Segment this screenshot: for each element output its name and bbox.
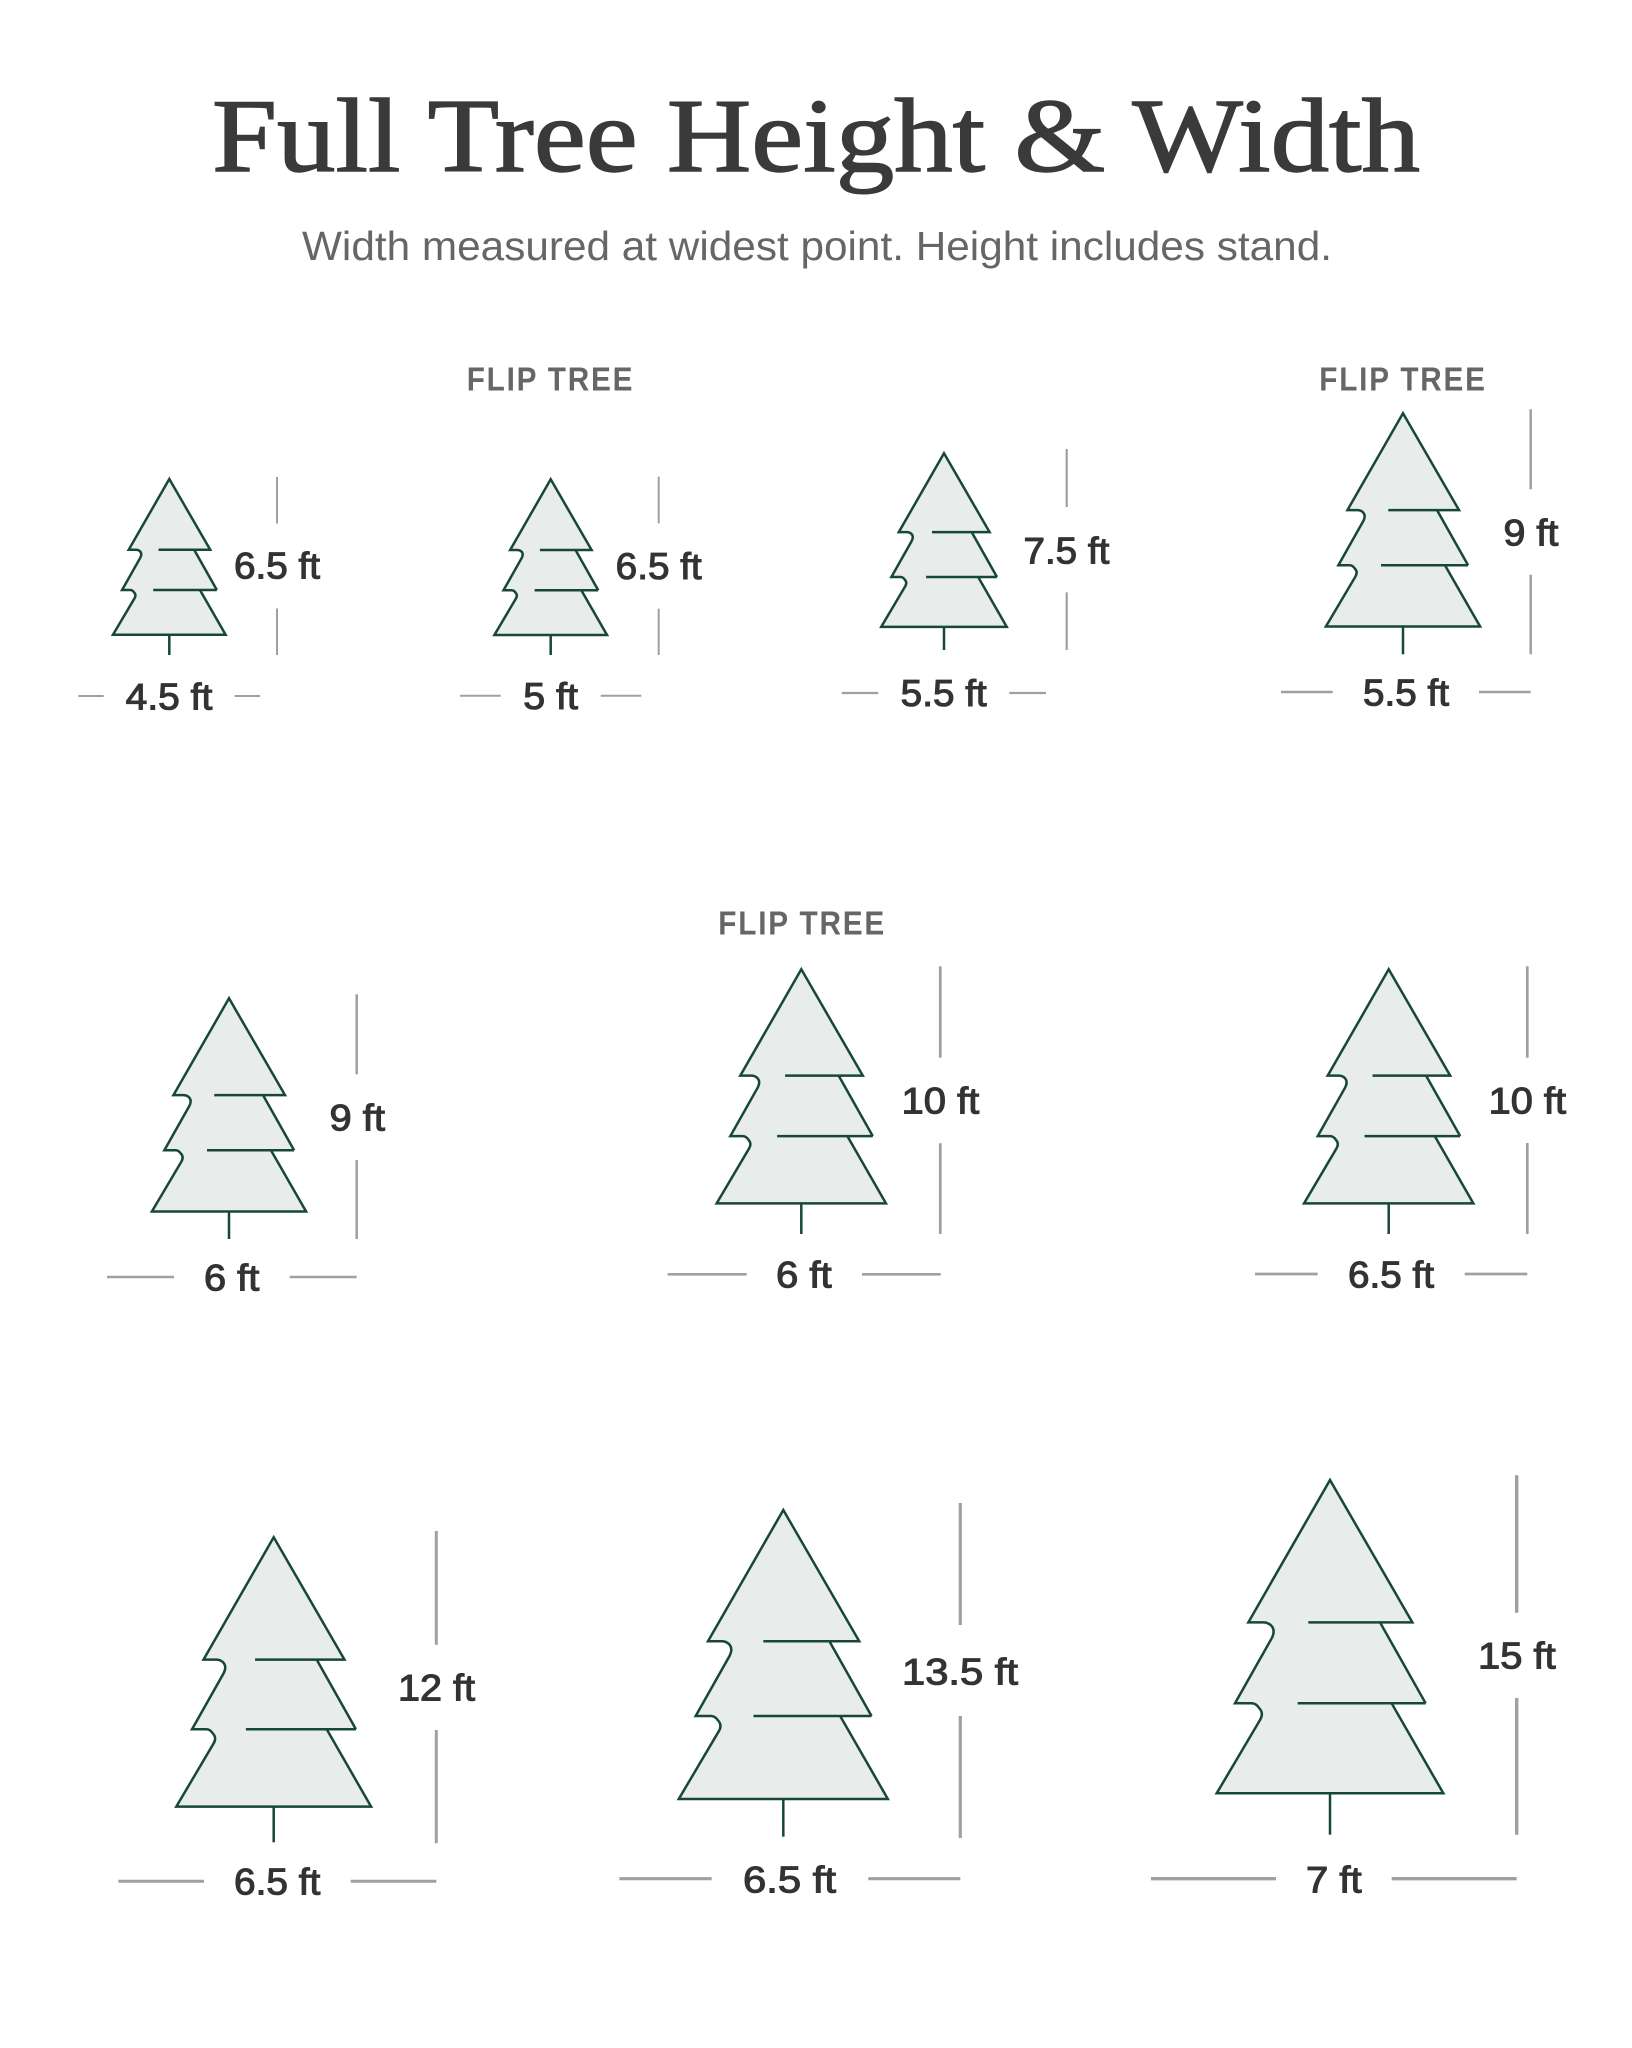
icon: tree (717, 969, 886, 1234)
tree panel: 6 ft wide, 10 ft tall (668, 966, 980, 1295)
width measure: 6.5 ft (1348, 1254, 1435, 1295)
tree panel: 6 ft wide, 9 ft tall (107, 994, 386, 1298)
tree panel: 7 ft wide, 15 ft tall (1151, 1475, 1556, 1901)
icon: tree (113, 479, 226, 655)
icon: tree (1217, 1480, 1443, 1835)
height measure: 13.5 ft (902, 1651, 1019, 1692)
icon: tree (679, 1510, 888, 1837)
flip tree label: FLIP TREE (1319, 360, 1487, 397)
flip tree label: FLIP TREE (718, 904, 886, 941)
height measure: 10 ft (1489, 1080, 1567, 1121)
height measure: 7.5 ft (1024, 530, 1110, 572)
width measure: 5 ft (523, 676, 579, 717)
subtitle: Width measured at widest point. Height includes stand. (302, 223, 1332, 269)
tree panel: 5.5 ft wide, 7.5 ft tall (842, 449, 1110, 714)
height measure: 9 ft (1504, 512, 1559, 553)
height measure: 9 ft (330, 1098, 386, 1139)
flip tree label: FLIP TREE (467, 360, 634, 397)
icon: tree (152, 998, 306, 1239)
icon: tree (1326, 413, 1480, 654)
icon: tree (1304, 969, 1473, 1234)
width measure: 6 ft (776, 1254, 832, 1295)
height measure: 12 ft (398, 1668, 476, 1709)
width measure: 7 ft (1306, 1860, 1362, 1901)
width measure: 6.5 ft (743, 1860, 837, 1901)
tree panel: 6.5 ft wide, 13.5 ft tall (619, 1503, 1019, 1901)
width measure: 5.5 ft (901, 673, 987, 714)
tree panel: 5.5 ft wide, 9 ft tall (1281, 409, 1559, 713)
tree panel: 4.5 ft wide, 6.5 ft tall (78, 477, 321, 718)
icon: tree (881, 453, 1007, 650)
title: Full Tree Height & Width (212, 77, 1420, 194)
tree panel: 6.5 ft wide, 12 ft tall (118, 1531, 476, 1902)
tree panel: 6.5 ft wide, 10 ft tall (1255, 966, 1567, 1295)
width measure: 6 ft (204, 1257, 260, 1298)
width measure: 5.5 ft (1363, 672, 1450, 713)
height measure: 15 ft (1478, 1636, 1556, 1677)
icon: tree (176, 1537, 371, 1842)
height measure: 10 ft (902, 1080, 980, 1121)
width measure: 4.5 ft (126, 676, 213, 718)
height measure: 6.5 ft (234, 546, 321, 586)
tree panel: 5 ft wide, 6.5 ft tall (460, 477, 702, 717)
width measure: 6.5 ft (234, 1862, 321, 1902)
icon: tree (494, 479, 607, 655)
height measure: 6.5 ft (616, 546, 702, 587)
